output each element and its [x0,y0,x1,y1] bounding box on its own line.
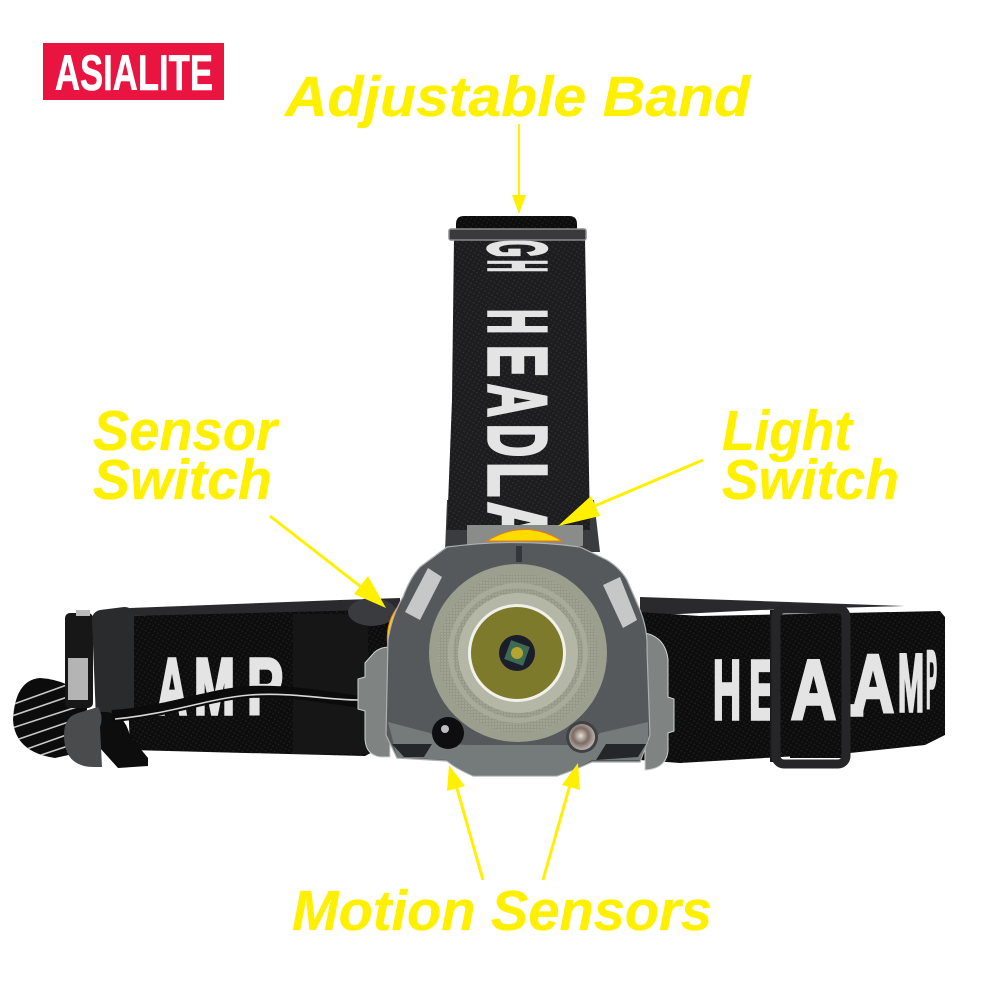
left band text: A [157,642,187,731]
lower shell plate [388,722,648,775]
band text: E [749,643,777,737]
shell vents [392,744,646,760]
strap woven text: H [471,309,564,334]
motion sensor: left [432,717,464,749]
strap buckle [449,229,586,240]
band text: L [824,642,864,733]
left buckle assembly [64,607,148,768]
strap woven text: A [471,502,564,543]
right slider buckle: A [791,643,836,737]
strap woven text: H [471,260,564,272]
buckle upright [92,607,134,719]
head mount behind strap [445,500,600,552]
right side bracket [645,633,674,770]
band text: H [713,643,741,737]
label: Sensor Switch [93,399,280,512]
heading: Motion Sensors: Motion Sensors [292,879,712,943]
top bracket [467,525,583,546]
LED [499,635,535,671]
left band text: P [247,642,283,731]
strap woven text: D [471,424,564,457]
rear band end [65,613,93,708]
band text [713,635,937,737]
coiled cord [13,678,88,758]
cord clip hook [100,712,148,768]
top strap [447,216,590,543]
shell notches [516,546,522,562]
band text: M [898,638,924,729]
band text: A [852,639,894,730]
motion sensor: right [566,721,598,753]
shell highlights [405,568,637,628]
head shell [386,542,650,776]
light switch button [487,530,562,541]
left side bracket [358,647,390,757]
arrow: Light Switch [558,460,703,526]
left head band [125,610,395,756]
sensor switch rocker [387,602,402,648]
arrows: Motion Sensors [447,763,580,880]
strap woven text: L [471,462,564,497]
label: Light Switch: Light [722,399,854,463]
right thin rear strap [640,597,905,616]
logo: ASIALITE [43,43,224,101]
right slider buckle [770,609,846,764]
left band text: M [194,642,235,731]
lens bezel [429,564,607,742]
cable [112,692,360,719]
band patch [293,614,368,754]
right head band [640,609,945,764]
strap body [447,238,590,530]
strap woven text: A [471,384,564,417]
text: P [926,635,937,726]
logo: ASIALITE: ASIALITE [55,45,213,101]
strap woven text: G [471,240,564,257]
left thin rear strap [130,598,400,616]
strap stub above buckle [456,216,577,236]
heading: Adjustable Band: Adjustable Band [283,65,751,129]
headlamp unit [348,525,674,776]
strap woven text: E [471,345,564,377]
label: Light Switch: Switch [722,448,899,512]
left band text [157,642,283,731]
label: Light Switch [722,399,899,512]
reflector [471,607,563,699]
label: Sensor Switch: Switch [93,448,272,512]
arrow: Adjustable Band [512,124,526,214]
label: Sensor Switch: Sensor [93,399,280,463]
rear knob [348,598,396,626]
cord clip [64,707,102,767]
arrow: Sensor Switch [270,516,386,608]
strap woven text [486,240,548,525]
